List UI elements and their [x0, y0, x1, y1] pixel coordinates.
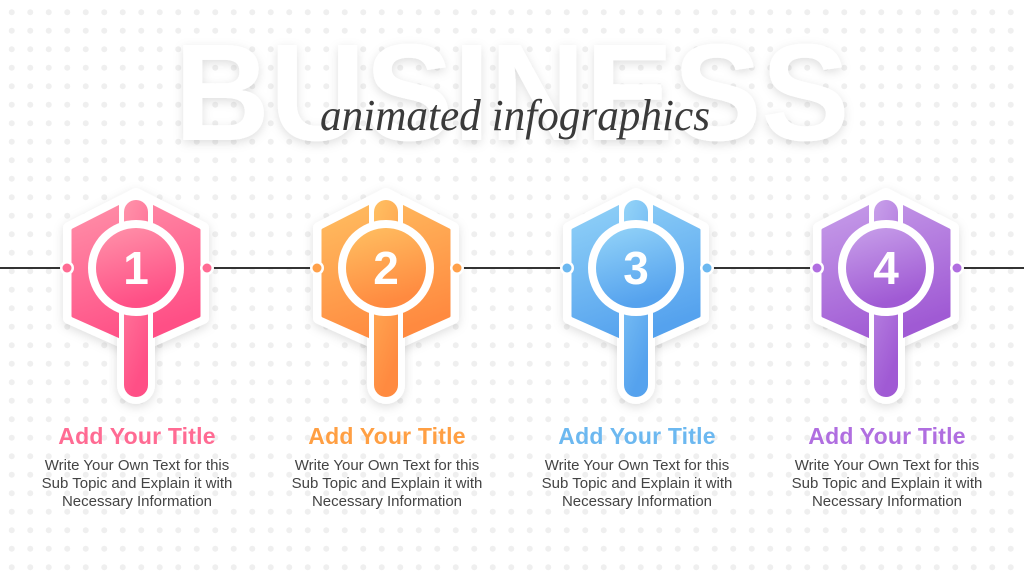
step 3 icon — [560, 194, 714, 404]
step 1 text: Sub Topic and Explain it with — [42, 475, 232, 492]
step 2 text — [292, 457, 482, 510]
title: BUSINESS: BUSINESS — [174, 16, 850, 170]
step 2 text: Sub Topic and Explain it with — [292, 475, 482, 492]
step 4 title: Add Your Title — [808, 423, 966, 449]
step 3 text — [542, 457, 732, 510]
step 4 text: Necessary Information — [812, 493, 962, 510]
step 3 text: Necessary Information — [562, 493, 712, 510]
step 3 title: Add Your Title — [558, 423, 716, 449]
step 4 icon — [810, 194, 964, 404]
step 3 text: Write Your Own Text for this — [545, 457, 729, 474]
step 1 text — [42, 457, 232, 510]
step 1 icon: 1 — [123, 242, 149, 294]
step 1 text: Write Your Own Text for this — [45, 457, 229, 474]
step 2 text: Write Your Own Text for this — [295, 457, 479, 474]
step 4 text: Sub Topic and Explain it with — [792, 475, 982, 492]
step 3 icon: 3 — [623, 242, 649, 294]
step 2 text: Necessary Information — [312, 493, 462, 510]
subtitle: animated infographics — [320, 91, 710, 140]
step 2 icon: 2 — [373, 242, 399, 294]
step 3 text: Sub Topic and Explain it with — [542, 475, 732, 492]
timeline line — [0, 267, 1024, 269]
step 1 title: Add Your Title — [58, 423, 216, 449]
step 1 icon — [60, 194, 214, 404]
step 2 title: Add Your Title — [308, 423, 466, 449]
step 4 icon: 4 — [873, 242, 899, 294]
step 4 text: Write Your Own Text for this — [795, 457, 979, 474]
step 1 text: Necessary Information — [62, 493, 212, 510]
step 4 text — [792, 457, 982, 510]
step 2 icon — [310, 194, 464, 404]
